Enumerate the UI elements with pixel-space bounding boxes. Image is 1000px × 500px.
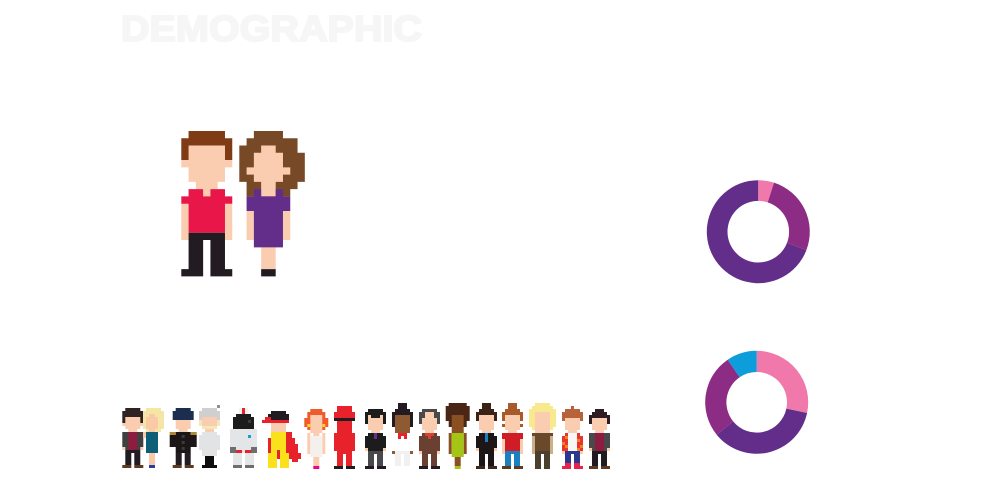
- character: red vest white shirt: [562, 406, 583, 469]
- character: orange hair white dress: [304, 409, 328, 469]
- character: white-haired scientist: [199, 405, 220, 468]
- character: grey jacket maroon shirt: [589, 409, 610, 469]
- character: long blonde hair brown top: [529, 403, 556, 469]
- row of pixel characters: [122, 403, 610, 469]
- character: astronaut: [230, 408, 257, 468]
- character: woman with bun white outfit: [392, 403, 413, 466]
- character: brown suit: [419, 409, 440, 469]
- character: dark hair maroon shirt: [122, 408, 143, 468]
- icon: large pixel man: [181, 131, 232, 276]
- character: blonde teal dress: [143, 408, 164, 468]
- donut chart: lower: [705, 351, 808, 454]
- character: black suit blue tie: [476, 403, 497, 469]
- character: afro green dress: [446, 403, 470, 469]
- icon: large pixel woman: [239, 131, 305, 276]
- title: DEMOGRAPHIC: [121, 8, 422, 49]
- donut chart: upper: [707, 180, 810, 283]
- character: red hooded figure: [334, 406, 355, 469]
- character: yellow suit red cape: [262, 411, 301, 468]
- character: navy beanie black coat: [170, 408, 197, 468]
- character: red tee blue jeans: [502, 403, 523, 469]
- character: black suit purple tie: [365, 409, 386, 469]
